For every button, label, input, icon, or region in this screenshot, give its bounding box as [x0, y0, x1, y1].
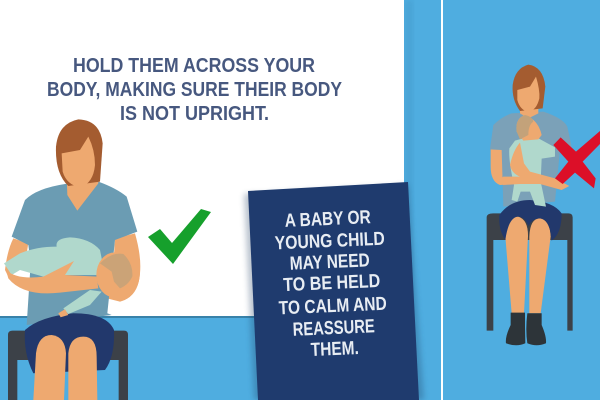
forearms: [500, 143, 569, 190]
callout text: MAY NEED: [289, 250, 370, 275]
callout text: REASSURE: [292, 316, 375, 341]
baby leg: [63, 290, 102, 314]
baby body: [509, 137, 555, 207]
chair: [487, 213, 573, 331]
panel: navy callout card: [244, 182, 424, 400]
boots: [506, 313, 525, 345]
face: [517, 77, 539, 112]
hair: [513, 65, 545, 111]
icon: green check mark: [148, 209, 211, 264]
illustration: woman holding baby upright: [487, 65, 600, 345]
illustration: woman holding baby correctly: [4, 119, 140, 400]
heading: HOLD THEM ACROSS YOUR: [73, 55, 315, 77]
heading: [47, 55, 343, 125]
forearm: [6, 261, 98, 293]
icon: red cross mark: [553, 131, 600, 188]
shorts: [25, 313, 114, 373]
hair back: [56, 119, 103, 186]
vertical white divider: [441, 0, 443, 400]
shirt: [490, 112, 572, 207]
heading: IS NOT UPRIGHT.: [120, 103, 269, 125]
heading: BODY, MAKING SURE THEIR BODY: [47, 79, 343, 101]
face: [62, 137, 95, 187]
neck: [67, 175, 98, 211]
shorts: [499, 200, 562, 241]
shirt: [12, 182, 137, 325]
baby head: [516, 115, 542, 141]
baby head: [96, 252, 134, 298]
chair: [8, 331, 128, 400]
callout text: TO CALM AND: [278, 294, 387, 319]
legs: [33, 335, 66, 400]
neck: [520, 107, 538, 118]
upper arms: [5, 238, 28, 277]
hand over head: [110, 273, 140, 302]
callout text: TO BE HELD: [283, 271, 381, 296]
panel: white instruction panel: [0, 0, 404, 316]
callout text: A BABY OR: [284, 207, 371, 232]
baby body: [4, 237, 105, 277]
left upper arm: [491, 148, 520, 185]
legs: [505, 217, 528, 313]
callout text: YOUNG CHILD: [274, 229, 385, 254]
callout text: THEM.: [310, 338, 359, 361]
callout text: [274, 207, 387, 361]
